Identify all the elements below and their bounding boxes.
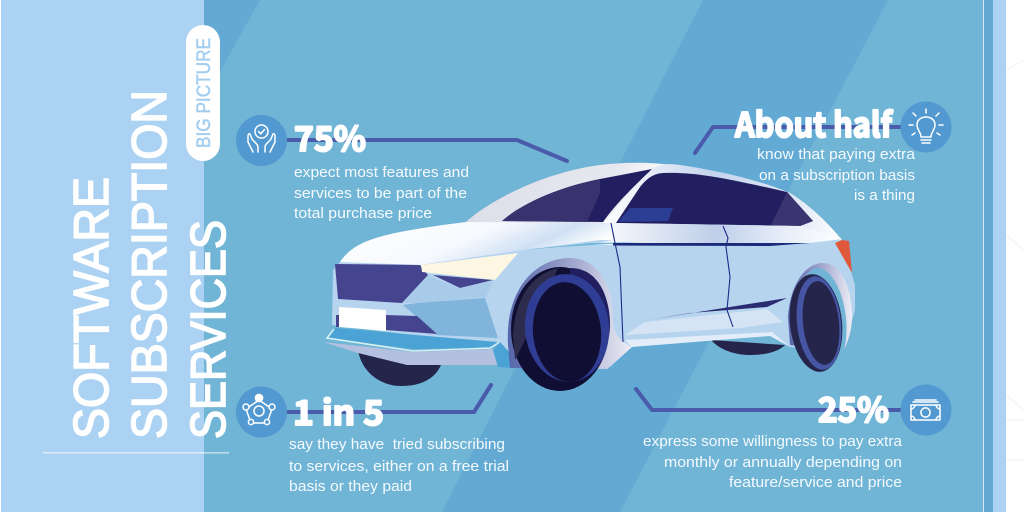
side window [616,173,813,226]
hood [340,222,612,265]
description [757,146,916,204]
windshield glare [502,179,600,222]
belt line [613,243,810,246]
icon: banknotes [900,384,952,436]
front wheel [511,267,614,391]
icon: light bulb [900,102,952,152]
description: expect most features and [294,164,469,181]
figure: About half [734,98,893,147]
big picture badge: BIG PICTURE [194,38,215,148]
figure: 25% [818,383,889,432]
leader lines [280,127,905,412]
description: know that paying extra [757,146,916,163]
front wheel arch [508,258,632,369]
icon: connected nodes [236,386,287,438]
roof frame [603,164,842,240]
title: SERVICES [182,220,236,439]
side intake [403,276,493,303]
front grille [335,264,428,303]
description: basis or they paid [289,478,412,495]
lower grille [336,315,437,334]
car illustration [323,163,855,391]
icon: hands holding check [236,115,287,166]
big picture badge [186,25,220,161]
stat: 75% [236,112,469,222]
far wheels [358,340,785,386]
description: is a thing [854,187,915,204]
stat: 1 in 5 [236,386,509,495]
under headlight [433,275,493,288]
description: express some willingness to pay extra [643,433,903,450]
description: on a subscription basis [759,167,915,184]
rear wheel arch [788,263,852,352]
description: monthly or annually depending on [664,454,902,471]
side sill [625,309,783,335]
description: services to be part of the [294,185,467,202]
window reflection [618,208,673,222]
tail light [835,240,852,273]
description: to services, either on a free trial [289,458,509,475]
white plate [339,307,386,331]
rear wheel [785,272,847,374]
description: total purchase price [294,205,432,222]
title: SUBSCRIPTION [123,90,177,439]
description [294,164,469,222]
door lines [611,223,733,342]
title: SOFTWARE [65,177,119,439]
description: say they have tried subscribing [289,436,505,453]
figure: 75% [294,112,366,161]
description [643,433,903,491]
title [65,90,236,439]
description [289,436,509,495]
lower lip [323,342,498,365]
car body [332,222,855,368]
splitter [328,328,497,349]
title divider [43,452,229,454]
rear window panel [771,192,813,226]
description: feature/service and price [729,474,902,491]
windshield frame [466,163,672,224]
side belt [590,223,842,245]
stat: 25% [643,383,952,491]
stat: about half [734,98,952,204]
headlight [421,253,518,280]
windshield glass [502,169,652,222]
figure: 1 in 5 [293,386,384,435]
